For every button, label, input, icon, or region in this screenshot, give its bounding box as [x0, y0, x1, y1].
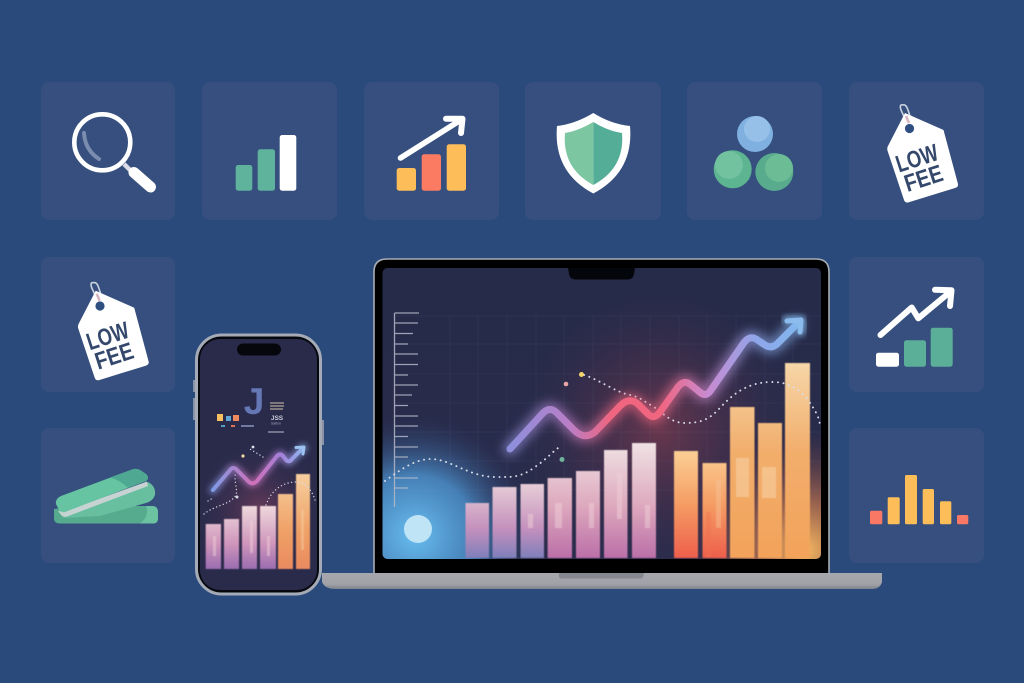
phone mini text: JSS: [271, 415, 284, 422]
panel: low fee tile left: [41, 257, 175, 392]
phone camera pill: [237, 344, 281, 356]
icon: low fee tag: LOW: [893, 139, 942, 178]
dotted trend lines: [385, 375, 820, 481]
pink bars: [466, 443, 656, 558]
data point dots: [560, 372, 584, 462]
panel: distribution tile: [849, 428, 984, 563]
icon: shield: [557, 113, 630, 194]
panel: magnifier tile: [41, 82, 175, 220]
panel: diversification tile: [687, 82, 822, 220]
phone screen: [200, 339, 317, 590]
phone mini legend: [217, 414, 254, 427]
phone body: [196, 335, 320, 594]
phone dotted lines: [204, 449, 315, 514]
laptop lid: [374, 259, 829, 574]
glowing trend line with arrow: [510, 320, 802, 449]
icon: low fee tag: FEE: [901, 160, 946, 198]
icon: low fee tag: [887, 105, 958, 203]
icon: three rising bars: [236, 135, 296, 191]
glowing orb: [404, 515, 432, 543]
panel: growth arrow tile: [364, 82, 499, 220]
panel: bar chart tile: [202, 82, 337, 220]
phone heading glyph: J: [244, 381, 264, 422]
panel: low fee tile top: [849, 82, 984, 220]
icon: distribution bars: [870, 475, 968, 524]
phone mini text: [268, 403, 284, 432]
phone bars: [206, 474, 310, 569]
phone side buttons: [194, 380, 323, 445]
icon: zigzag arrow with bars: [876, 290, 953, 367]
chart axis ruler: [394, 313, 419, 507]
icon: stack of notes: [54, 469, 158, 524]
laptop notch: [568, 268, 635, 280]
panel: money stack tile: [41, 428, 175, 563]
icon: three circles: [714, 116, 793, 191]
icon: low fee tag left: [78, 283, 149, 380]
laptop: [322, 259, 882, 589]
icon: low fee tag left: FEE: [92, 338, 137, 375]
phone data dots: [236, 446, 254, 498]
laptop base: [322, 573, 882, 589]
laptop screen chart: [382, 268, 821, 559]
panel: trend tile: [849, 257, 984, 392]
panel: shield tile: [525, 82, 661, 220]
phone mini text: Salton: [271, 422, 281, 426]
icon: bars with rising arrow: [397, 119, 466, 191]
phone: [194, 335, 323, 594]
icon: magnifying glass: [74, 114, 150, 187]
orange bars: [674, 363, 810, 558]
phone trend line: [213, 447, 304, 490]
icon: low fee tag left: LOW: [83, 317, 133, 356]
